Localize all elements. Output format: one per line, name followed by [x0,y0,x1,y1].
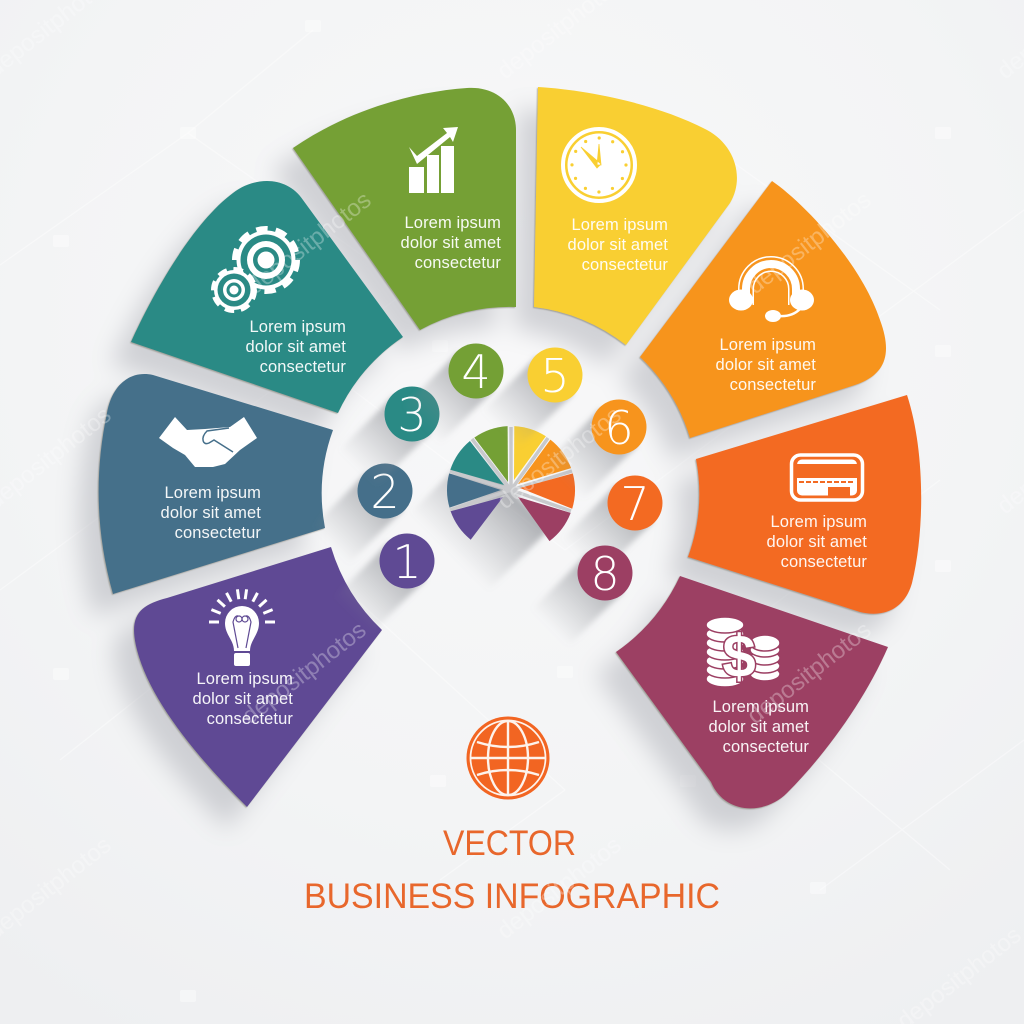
text block: Lorem ipsum [713,698,809,716]
segment shape [99,374,333,594]
number badge 1 [352,534,434,616]
text block: dolor sit amet [568,236,668,254]
panel: segment 2 slate blue [99,374,333,594]
title: VECTOR [443,824,576,863]
number badge 8 [550,546,632,628]
text block: Lorem ipsum [165,484,261,502]
number badge 4: 4 [461,345,491,399]
panel: segment 4 green [293,88,516,330]
text block: dolor sit amet [767,533,867,551]
text block: dolor sit amet [246,338,346,356]
number badge 3: 3 [397,388,427,442]
text: depositphotos [492,401,626,515]
panel: segment 3 teal [131,181,403,413]
text block: Lorem ipsum [771,513,867,531]
icon: headset [729,264,814,322]
number badge 3 [357,386,440,469]
text block: consectetur [730,376,816,394]
text block: consectetur [175,524,261,542]
text block: Lorem ipsum [250,318,346,336]
centre pie chart [447,426,575,552]
number badge 6 [564,400,646,482]
panel: segment 7 red-orange [688,395,921,614]
icon: credit card [792,455,862,500]
text block: consectetur [781,553,867,571]
icon: handshake [159,417,257,467]
number badge 5 [500,348,582,430]
text: depositphotos [237,616,371,730]
segment shape [534,87,737,345]
text block: Lorem ipsum [572,216,668,234]
number badge 2 [330,464,412,546]
title: BUSINESS INFOGRAPHIC [304,877,720,916]
number badge 1: 1 [392,535,422,589]
text block: dolor sit amet [161,504,261,522]
text: depositphotos [492,831,626,945]
number badge 6: 6 [604,401,634,455]
icon: coins and dollar [706,617,780,690]
text block: Lorem ipsum [405,214,501,232]
text: depositphotos [742,616,876,730]
segment shape [616,576,888,808]
number badge 2: 2 [370,465,400,519]
text block: dolor sit amet [709,718,809,736]
text block: dolor sit amet [716,356,816,374]
icon: globe [466,716,550,800]
number badge 4 [421,344,504,426]
text: depositphotos [742,186,876,300]
text block: dolor sit amet [401,234,501,252]
text block: consectetur [415,254,501,272]
text block: dolor sit amet [193,690,293,708]
icon: coins and dollar: $ [722,623,756,690]
icon: clock [563,129,635,201]
number badge 7 [580,476,662,558]
segment shape [134,547,382,807]
number badge 8: 8 [590,547,620,601]
text block: Lorem ipsum [197,670,293,688]
panel: segment 8 maroon [616,576,888,808]
text block: consectetur [582,256,668,274]
text block: consectetur [260,358,346,376]
text block: Lorem ipsum [720,336,816,354]
panel: segment 6 orange [640,181,886,438]
segment shape [688,395,921,614]
title [304,824,720,916]
text block: consectetur [723,738,809,756]
icon: gears [214,229,297,310]
segment shape [131,181,403,413]
number badge 5: 5 [540,349,570,403]
icon: light bulb [209,589,275,666]
number badge 7: 7 [620,477,650,531]
panel: segment 1 purple [134,547,382,807]
text block: consectetur [207,710,293,728]
panel: segment 5 yellow [534,87,737,345]
text: depositphotos [242,186,376,300]
icon: growth chart [409,127,458,193]
segment shape [293,88,516,330]
segment shape [640,181,886,438]
